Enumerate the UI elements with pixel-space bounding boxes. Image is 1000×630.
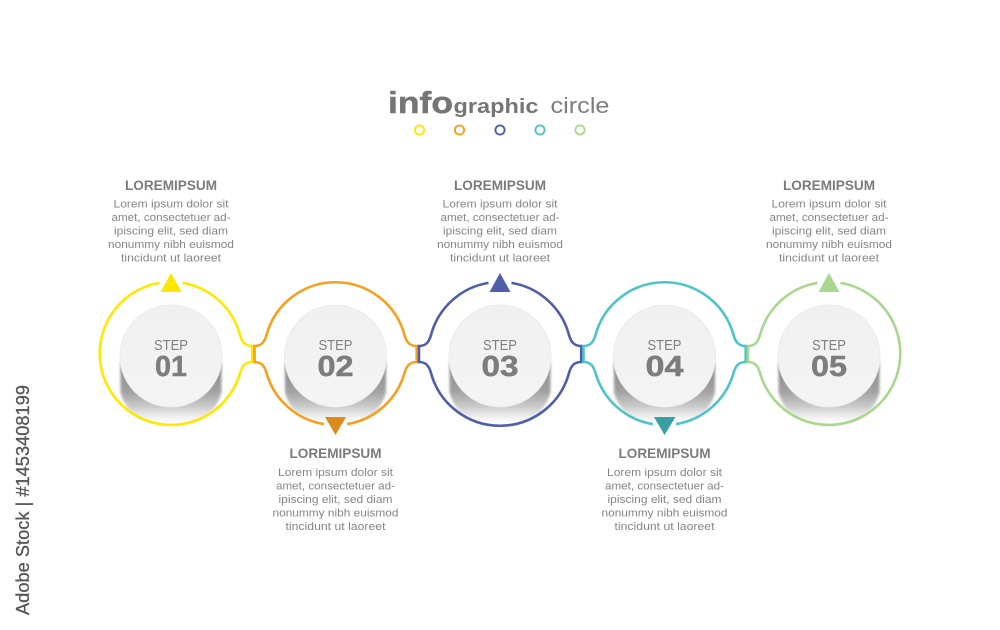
panel: step 2 circle xyxy=(254,282,417,435)
text block: step 3: ipiscing elit, sed diam xyxy=(443,226,557,238)
step number: 04 xyxy=(646,351,684,383)
step label: STEP xyxy=(154,337,188,354)
disc xyxy=(120,305,222,407)
text block: step 4 xyxy=(602,445,728,533)
text block: step 3: Lorem ipsum dolor sit xyxy=(442,198,558,210)
green up triangle xyxy=(818,273,840,292)
teal ring xyxy=(584,282,746,424)
side stock label: Adobe Stock | #1453408199 xyxy=(12,385,33,615)
text block: step 5: LOREMIPSUM xyxy=(783,177,875,193)
text block: step 1: tincidunt ut laoreet xyxy=(121,252,221,264)
panel: step 3 circle xyxy=(419,273,581,428)
text block: step 4: amet, consectetuer ad- xyxy=(605,480,724,492)
step number: 05 xyxy=(811,351,847,383)
step number: 01 xyxy=(155,351,187,383)
disc shadow xyxy=(614,362,715,428)
text block: step 1: Lorem ipsum dolor sit xyxy=(114,198,228,210)
disc shadow xyxy=(778,362,880,428)
disc xyxy=(778,305,880,407)
text block: step 5 xyxy=(766,177,892,264)
text block: step 2: Lorem ipsum dolor sit xyxy=(278,467,393,479)
text block: step 1 xyxy=(108,177,234,264)
step number: 03 xyxy=(482,351,518,383)
disc xyxy=(614,305,716,407)
text block: step 1: ipiscing elit, sed diam xyxy=(114,226,228,238)
teal down triangle xyxy=(654,417,676,435)
title colour dots xyxy=(415,125,585,135)
disc shadow xyxy=(285,362,386,428)
text block: step 2: amet, consectetuer ad- xyxy=(276,480,395,492)
orange down triangle xyxy=(325,417,346,435)
step label: STEP xyxy=(483,337,517,354)
text block: step 2: LOREMIPSUM xyxy=(290,445,382,461)
text block: step 5: tincidunt ut laoreet xyxy=(779,252,879,264)
text block: step 3 xyxy=(437,177,563,264)
text block: step 3: amet, consectetuer ad- xyxy=(440,212,560,224)
text block: step 3: LOREMIPSUM xyxy=(454,177,546,193)
text block: step 4: nonummy nibh euismod xyxy=(602,508,728,520)
panel: step 1 circle xyxy=(100,273,252,428)
text block: step 4: LOREMIPSUM xyxy=(618,445,710,461)
text block: step 4: ipiscing elit, sed diam xyxy=(608,494,722,506)
yellow up triangle xyxy=(160,273,182,292)
disc xyxy=(284,305,386,407)
step label: STEP xyxy=(648,337,682,354)
text block: step 4: tincidunt ut laoreet xyxy=(614,521,714,533)
step number: 02 xyxy=(318,351,354,383)
disc xyxy=(449,305,551,407)
yellow ring xyxy=(100,283,252,425)
text block: step 3: nonummy nibh euismod xyxy=(437,239,563,251)
text block: step 2 xyxy=(272,445,398,533)
text block: step 5: ipiscing elit, sed diam xyxy=(772,226,886,238)
disc shadow xyxy=(120,362,222,428)
title: info xyxy=(388,85,453,120)
text block: step 5: Lorem ipsum dolor sit xyxy=(772,198,886,210)
text block: step 2: nonummy nibh euismod xyxy=(272,508,398,520)
text block: step 3: tincidunt ut laoreet xyxy=(450,252,550,264)
text block: step 1: LOREMIPSUM xyxy=(125,177,217,193)
orange ring xyxy=(254,282,417,424)
text block: step 4: Lorem ipsum dolor sit xyxy=(607,467,722,479)
panel: step 5 circle xyxy=(748,273,900,428)
green ring xyxy=(748,283,900,425)
text block: step 2: ipiscing elit, sed diam xyxy=(278,494,392,506)
blue ring xyxy=(419,283,581,426)
text block: step 5: nonummy nibh euismod xyxy=(766,239,892,251)
text block: step 1: nonummy nibh euismod xyxy=(108,239,234,251)
title: circle xyxy=(550,93,610,118)
disc shadow xyxy=(450,362,550,428)
text block: step 2: tincidunt ut laoreet xyxy=(286,521,386,533)
step label: STEP xyxy=(318,337,352,354)
panel: step 4 circle xyxy=(584,282,746,435)
text block: step 5: amet, consectetuer ad- xyxy=(770,212,889,224)
step label: STEP xyxy=(812,337,846,354)
blue up triangle xyxy=(490,273,510,292)
title xyxy=(388,85,610,120)
text block: step 1: amet, consectetuer ad- xyxy=(112,212,231,224)
title: graphic xyxy=(454,96,538,118)
